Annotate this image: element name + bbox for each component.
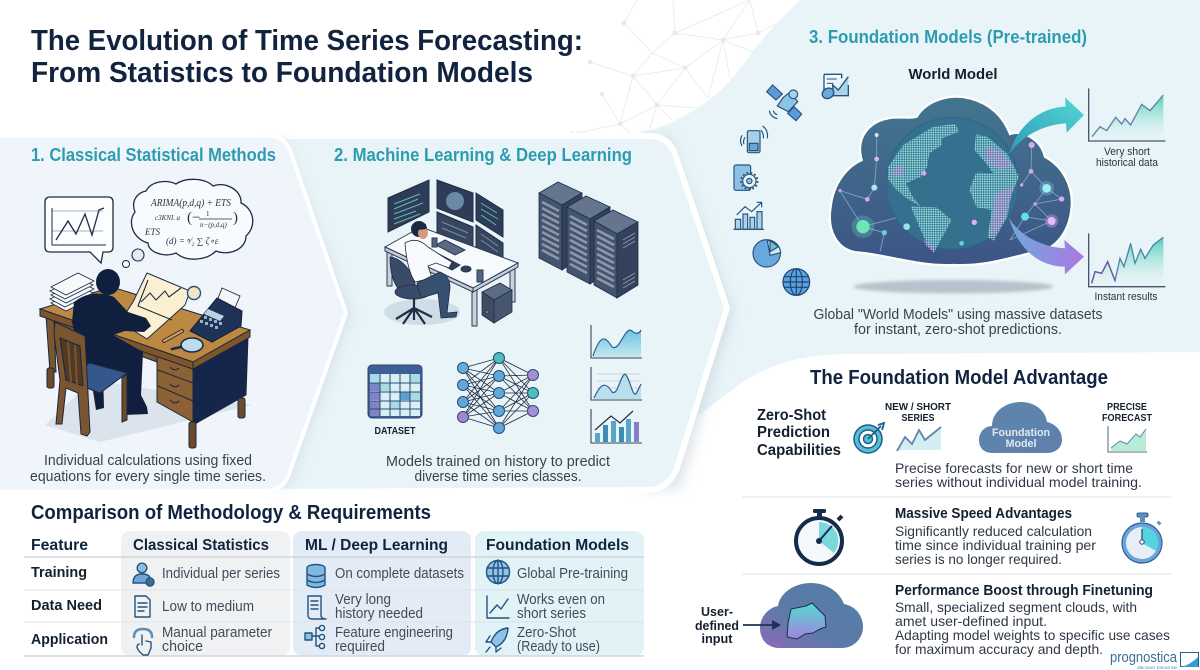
pen and magnifier xyxy=(164,331,203,352)
icon: tablet with gear xyxy=(734,165,758,190)
icon: document xyxy=(135,596,150,617)
title: The Evolution of Time Series Forecasting: xyxy=(31,25,583,57)
label: zero-shot xyxy=(757,407,841,459)
cloud: foundation model: Model xyxy=(1006,438,1036,450)
thought cloud with formulas: ARIMA(p,d,q) + ETS xyxy=(150,198,231,209)
icon: globe xyxy=(783,269,810,295)
icon: pie chart xyxy=(753,240,781,267)
cloud: foundation model xyxy=(979,402,1062,453)
heading: comparison: Comparison of Methodology & Requirements xyxy=(31,502,431,524)
heading: machine learning and deep learning: 2. Machine Learning & Deep Learning xyxy=(334,145,632,165)
panel: classical statistical methods background xyxy=(0,136,346,492)
table header row: Foundation Models xyxy=(486,537,629,554)
thought cloud with formulas: 1 xyxy=(206,210,210,218)
caption: world models xyxy=(814,306,1102,338)
icon: dataset table: DATASET xyxy=(374,426,416,437)
panel: machine learning and deep learning background xyxy=(250,136,727,492)
desk xyxy=(385,227,518,326)
illustration: world model cloud and globe xyxy=(830,88,1165,293)
arrow: to instant results xyxy=(1009,217,1084,274)
icon: globe xyxy=(486,560,510,584)
comparison table xyxy=(24,531,644,656)
row: data need: history needed xyxy=(335,606,423,622)
label: instant results: Instant results xyxy=(1094,291,1158,303)
thought cloud with formulas: c3KNL a xyxy=(155,214,180,222)
precise forecast: PRECISE xyxy=(1107,402,1147,413)
row: application xyxy=(31,625,600,655)
person silhouette xyxy=(72,269,151,415)
row: application: Application xyxy=(31,631,108,648)
desk xyxy=(40,287,250,448)
small chart: area xyxy=(591,325,642,358)
table header row: ML / Deep Learning xyxy=(305,537,448,554)
chair xyxy=(54,322,127,436)
thought cloud with formulas xyxy=(122,179,253,268)
icon: stopwatch navy xyxy=(796,509,842,564)
label: zero-shot: Capabilities xyxy=(757,442,841,459)
row: training: Training xyxy=(31,564,87,581)
caption: classical methods xyxy=(30,452,266,485)
row: data need xyxy=(31,592,605,622)
cloud: foundation model: Foundation xyxy=(992,427,1050,439)
table header row: Classical Statistics xyxy=(133,537,269,554)
label: very short historical data xyxy=(1096,146,1159,169)
icon: database xyxy=(307,564,325,588)
speed text xyxy=(895,506,1096,567)
row: application: Feature engineering xyxy=(335,625,453,641)
icon: bars and trend xyxy=(733,202,764,229)
row: data need: Data Need xyxy=(31,597,102,614)
thought cloud with formulas: ) xyxy=(233,210,238,226)
new or short series xyxy=(885,402,951,451)
logo: prognostica xyxy=(1110,650,1198,670)
new or short series: SERIES xyxy=(902,413,935,424)
section: performance boost through finetuning xyxy=(695,583,1170,657)
icon: touch hand xyxy=(134,629,152,655)
row: application: choice xyxy=(162,639,203,655)
row: training: On complete datasets xyxy=(335,566,464,582)
label: very short historical data: Very short xyxy=(1104,146,1150,158)
row: application: (Ready to use) xyxy=(517,639,600,655)
row: training: Individual per series xyxy=(162,566,280,582)
server 2 xyxy=(567,196,610,284)
cloud: segment xyxy=(760,583,863,648)
illustration: engineer at multi-monitor workstation xyxy=(384,180,518,326)
description: zero-shot: Precise forecasts for new or short time xyxy=(895,460,1133,476)
performance text: for maximum accuracy and depth. xyxy=(895,641,1103,657)
icon column: data sources xyxy=(733,74,848,295)
thought cloud with formulas: n−(p,d,q) xyxy=(200,221,228,229)
arrow: input into cloud xyxy=(743,620,781,630)
illustration: statistician at desk xyxy=(40,179,253,448)
arrow: to very short historical data xyxy=(1009,97,1084,154)
icon: satellite xyxy=(767,85,802,121)
caption: classical methods: equations for every single time series. xyxy=(30,468,266,485)
performance text: Adapting model weights to specific use cases xyxy=(895,627,1170,643)
icon: flow diagram xyxy=(305,625,325,649)
monitors xyxy=(388,180,503,267)
thought cloud with formulas: (− xyxy=(187,210,200,226)
icon: small line chart xyxy=(487,596,509,618)
speed text: series is no longer required. xyxy=(895,551,1062,567)
thought cloud with formulas: ETS xyxy=(144,227,161,237)
title: From Statistics to Foundation Models xyxy=(31,57,533,89)
illustration: server racks xyxy=(539,182,638,298)
section: zero-shot prediction capabilities xyxy=(757,402,1152,490)
row: data need: Low to medium xyxy=(162,599,254,615)
row: application: Zero-Shot xyxy=(517,625,576,641)
row: data need: Works even on xyxy=(517,592,605,608)
row: data need: Very long xyxy=(335,592,391,608)
office chair xyxy=(390,257,432,324)
paper stack xyxy=(50,273,94,311)
row: application: Manual parameter xyxy=(162,625,272,641)
label: user-defined input: User- xyxy=(701,604,733,619)
label: world model: World Model xyxy=(908,66,998,83)
small chart: bars xyxy=(591,409,642,443)
speed text: time since individual training per xyxy=(895,537,1096,553)
label: zero-shot: Prediction xyxy=(757,424,830,441)
label: zero-shot: Zero-Shot xyxy=(757,407,826,424)
icon: stopwatch blue xyxy=(1122,513,1162,563)
caption: world models: Global "World Models" using massive datasets xyxy=(814,306,1102,323)
logo: prognostica: discover tomorrow xyxy=(1137,665,1178,670)
icon: rocket xyxy=(486,628,508,652)
paper chart scroll xyxy=(120,273,200,339)
row: training: Global Pre-training xyxy=(517,566,628,582)
small chart: noisy line xyxy=(591,367,642,400)
table header row xyxy=(31,537,629,554)
speed text: Significantly reduced calculation xyxy=(895,523,1092,539)
caption: world models: for instant, zero-shot predictions. xyxy=(854,321,1062,338)
chart: very short history xyxy=(1089,88,1165,141)
caption: machine learning: diverse time series classes. xyxy=(414,468,582,485)
performance text: Small, specialized segment clouds, with xyxy=(895,599,1137,615)
label: user-defined input xyxy=(695,604,739,646)
section: massive speed advantages xyxy=(796,506,1162,567)
icon: chart speech bubble xyxy=(45,197,113,263)
heading: classical statistical methods: 1. Classical Statistical Methods xyxy=(31,145,276,165)
speed text: Massive Speed Advantages xyxy=(895,506,1072,522)
icon: target xyxy=(854,423,884,453)
new or short series: NEW / SHORT xyxy=(885,402,951,413)
description: zero-shot xyxy=(895,460,1142,490)
panel: foundation models background xyxy=(640,0,1200,418)
label: very short historical data: historical data xyxy=(1096,157,1159,169)
tower computer xyxy=(482,283,512,323)
caption: classical methods: Individual calculations using fixed xyxy=(44,452,252,469)
performance text xyxy=(895,583,1170,657)
icon: person with gear xyxy=(133,563,154,586)
title xyxy=(31,25,583,89)
row: data need: short series xyxy=(517,606,586,622)
calculator xyxy=(190,288,242,342)
performance text: Performance Boost through Finetuning xyxy=(895,583,1153,599)
logo: prognostica: prognostica xyxy=(1110,650,1178,666)
row: application: required xyxy=(335,639,385,655)
icon: report chart xyxy=(820,74,848,101)
precise forecast: FORECAST xyxy=(1102,413,1152,424)
server 3 xyxy=(594,210,638,298)
icon: neural network xyxy=(458,352,538,434)
icon: dataset table xyxy=(368,365,422,437)
heading: foundation model advantage: The Foundation Model Advantage xyxy=(810,367,1108,389)
caption: machine learning xyxy=(386,453,611,485)
engineer xyxy=(405,221,457,318)
thought cloud with formulas: (d) = ⁿ⁄₂ ∑ ζ∘ε xyxy=(166,236,219,246)
table header row: Feature xyxy=(31,537,88,554)
row: training xyxy=(31,564,628,582)
icon: phone with signal xyxy=(740,126,768,153)
description: zero-shot: series without individual model training. xyxy=(895,474,1142,490)
label: user-defined input: input xyxy=(702,631,733,646)
inner segment shape xyxy=(787,603,826,639)
caption: machine learning: Models trained on history to predict xyxy=(386,453,611,470)
chart: instant results xyxy=(1089,233,1165,287)
label: user-defined input: defined xyxy=(695,618,739,633)
precise forecast xyxy=(1102,402,1152,452)
server 1 xyxy=(539,182,582,270)
performance text: amet user-defined input. xyxy=(895,613,1047,629)
icon: scroll xyxy=(308,596,326,619)
heading: foundation models: 3. Foundation Models (Pre-trained) xyxy=(809,27,1087,47)
